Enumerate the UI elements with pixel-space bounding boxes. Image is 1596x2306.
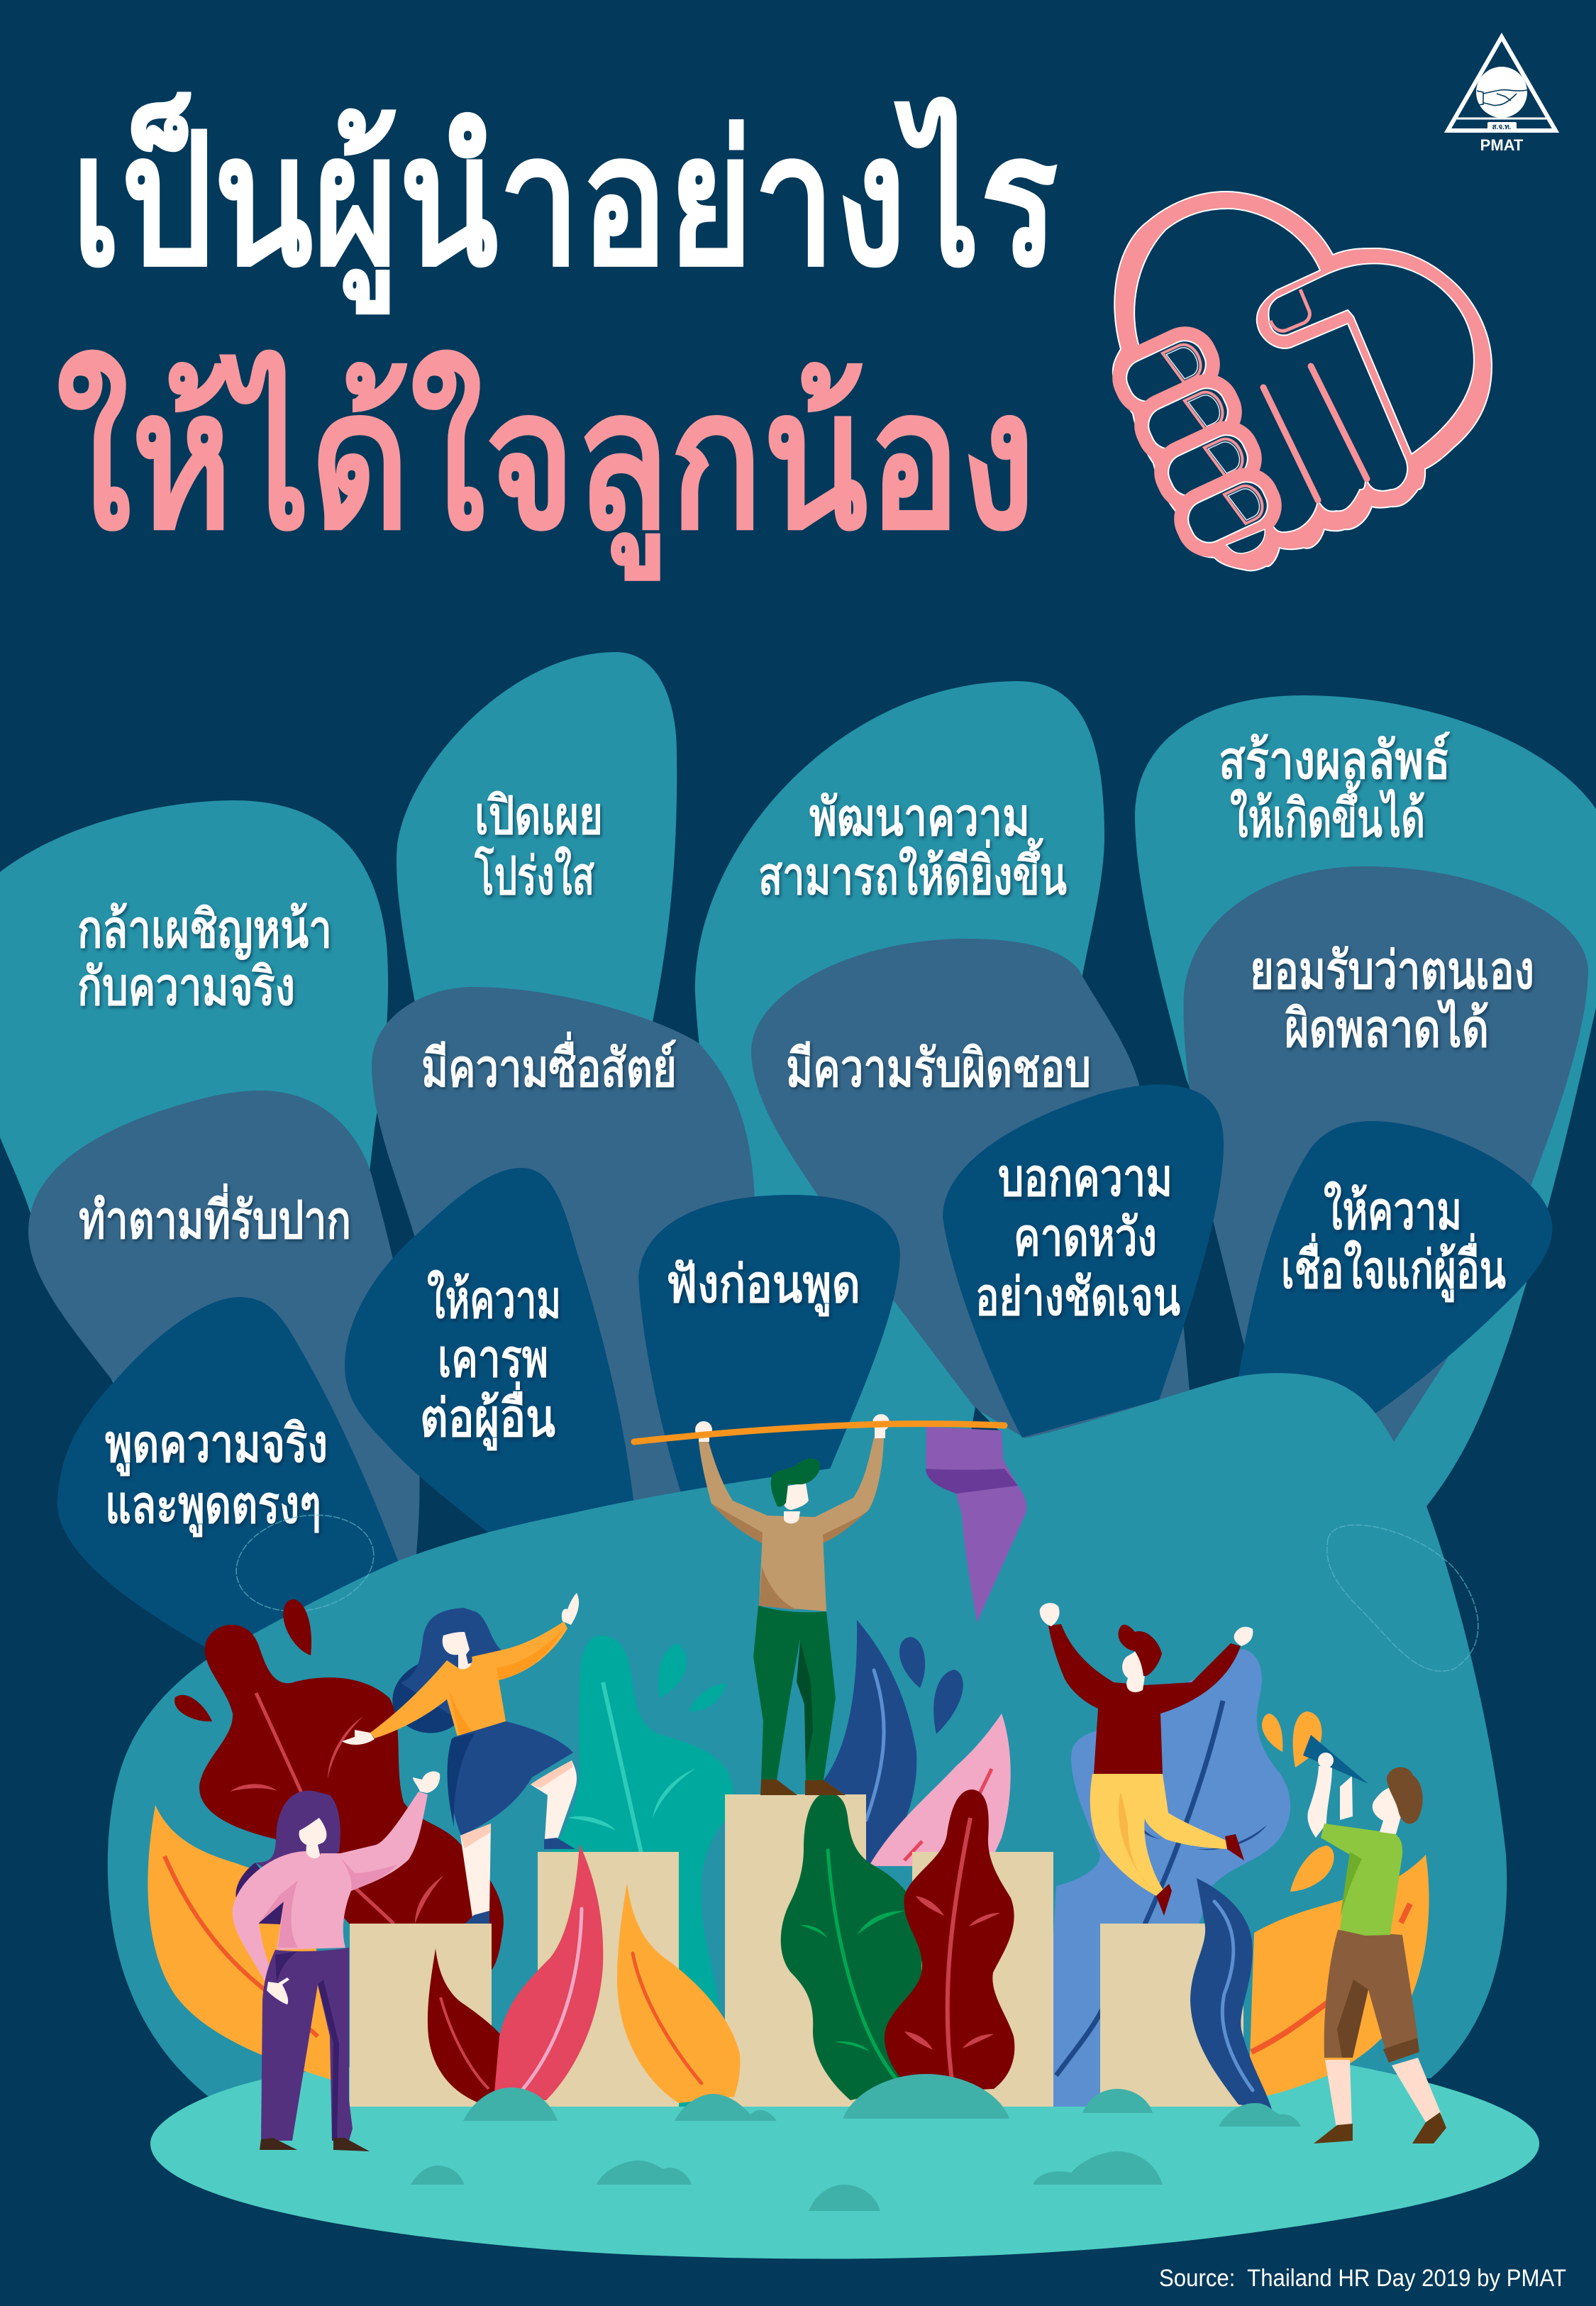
podium 4 [912, 1852, 1053, 2107]
panel: ให้ความเคารพต่อผู้อื่น [345, 1168, 635, 1540]
thin outline left [227, 1503, 383, 1623]
panel: บอกความคาดหวังอย่างชัดเจน: บอกความ [998, 1148, 1173, 1207]
panel: กล้าเผชิญหน้ากับความจริง: กับความจริง [77, 957, 295, 1016]
mounds [411, 2074, 1301, 2211]
person: centre man with flag [634, 1414, 1026, 1795]
plant: blue leaf right [1190, 1878, 1272, 2109]
podium 3 [725, 1794, 866, 2107]
panel: กล้าเผชิญหน้ากับความจริง [0, 800, 388, 1384]
thin outline right [1327, 1525, 1478, 1671]
panel: ฟังก่อนพูด: ฟังก่อนพูด [666, 1254, 860, 1316]
panel: บอกความคาดหวังอย่างชัดเจน: อย่างชัดเจน [975, 1267, 1180, 1326]
plant: small orange leaf [617, 1883, 740, 2103]
panel: พัฒนาความสามารถให้ดียิ่งขึ้น: พัฒนาความ [809, 788, 1030, 846]
panel: เปิดเผยโปร่งใส: โปร่งใส [475, 846, 594, 905]
podium 2 [538, 1852, 679, 2107]
panel: บอกความคาดหวังอย่างชัดเจน: คาดหวัง [1014, 1208, 1157, 1267]
panel: ให้ความเชื่อใจแก่ผู้อื่น: ให้ความ [1324, 1181, 1462, 1240]
title line 1: เป็นผู้นำอย่างไร [71, 89, 1058, 316]
plant: orange leaf right [1248, 1711, 1429, 2099]
title line 2: ให้ได้ใจลูกน้อง [56, 348, 1036, 582]
panel: ให้ความเคารพต่อผู้อื่น: เคารพ [438, 1329, 548, 1388]
panel: เปิดเผยโปร่งใส [397, 652, 677, 1029]
panel: เปิดเผยโปร่งใส: เปิดเผย [475, 786, 603, 845]
panel: ฟังก่อนพูด [638, 1195, 900, 1497]
podium 1 [350, 1924, 492, 2107]
panel: สร้างผลลัพธ์ให้เกิดขึ้นได้: สร้างผลลัพธ์ [1219, 731, 1451, 790]
plant: orange leaf left [148, 1805, 340, 2082]
panel: ยอมรับว่าตนเองผิดพลาดได้: ผิดพลาดได้ [1285, 999, 1489, 1058]
panel: กล้าเผชิญหน้ากับความจริง: กล้าเผชิญหน้า [77, 900, 332, 959]
plant: green [781, 1793, 922, 2100]
panel: มีความรับผิดชอบ [751, 939, 1190, 1440]
panel: สร้างผลลัพธ์ให้เกิดขึ้นได้ [1135, 695, 1596, 1506]
panel: มีความรับผิดชอบ: มีความรับผิดชอบ [786, 1039, 1091, 1098]
person: woman blue skirt orange top [342, 1593, 579, 1924]
plant: red pink leaf [494, 1844, 603, 2100]
panel: ให้ความเชื่อใจแก่ผู้อื่น [1238, 1121, 1552, 1416]
plant: dark red right [885, 1789, 1014, 2093]
plant: small red leaf [428, 1948, 518, 2103]
panel: ยอมรับว่าตนเองผิดพลาดได้ [1184, 866, 1588, 1442]
panel: พูดความจริงและพูดตรงๆ: และพูดตรงๆ [105, 1475, 321, 1537]
panel: มีความซื่อสัตย์: มีความซื่อสัตย์ [421, 1032, 677, 1098]
plant: pink leaf centre [869, 1714, 1011, 1866]
source note: Source: Thailand HR Day 2019 by PMAT [1159, 2265, 1566, 2292]
ground [150, 2051, 1539, 2258]
panel: พัฒนาความสามารถให้ดียิ่งขึ้น [695, 681, 1104, 1490]
panel: มีความซื่อสัตย์ [372, 987, 755, 1511]
logo: PMAT: ส.จ.ท. [1492, 123, 1512, 131]
panel: ให้ความเคารพต่อผู้อื่น: ต่อผู้อื่น [420, 1381, 555, 1450]
plant: dark red large [174, 1599, 504, 1973]
panel: บอกความคาดหวังอย่างชัดเจน [943, 1084, 1224, 1447]
logo: PMAT: PMAT [1480, 136, 1524, 154]
panel: พัฒนาความสามารถให้ดียิ่งขึ้น: สามารถให้ดียิ่งขึ้น [758, 838, 1067, 905]
panel: ให้ความเคารพต่อผู้อื่น: ให้ความ [427, 1270, 561, 1329]
panel: ทำตามที่รับปาก: ทำตามที่รับปาก [79, 1184, 351, 1249]
person: woman pink top [233, 1771, 440, 2151]
panel: พูดความจริงและพูดตรงๆ: พูดความจริง [105, 1414, 328, 1476]
panel: ให้ความเชื่อใจแก่ผู้อื่น: เชื่อใจแก่ผู้อื่น [1281, 1233, 1506, 1302]
plant: teal large [539, 1635, 733, 2107]
podium 5 [1100, 1924, 1243, 2107]
person: man with telescope [1303, 1735, 1446, 2144]
background hill [108, 1373, 1507, 2097]
plant: blue bush [1043, 1649, 1290, 2107]
logo: PMAT [1448, 37, 1556, 154]
icon: handshake heart [1102, 192, 1492, 570]
person: jumping man [1040, 1603, 1253, 1916]
panel: สร้างผลลัพธ์ให้เกิดขึ้นได้: ให้เกิดขึ้นได้ [1230, 780, 1425, 848]
panel: ทำตามที่รับปาก [28, 1091, 420, 1561]
plant: blue leaf centre [802, 1620, 963, 1873]
panel: พูดความจริงและพูดตรงๆ [57, 1297, 401, 1703]
